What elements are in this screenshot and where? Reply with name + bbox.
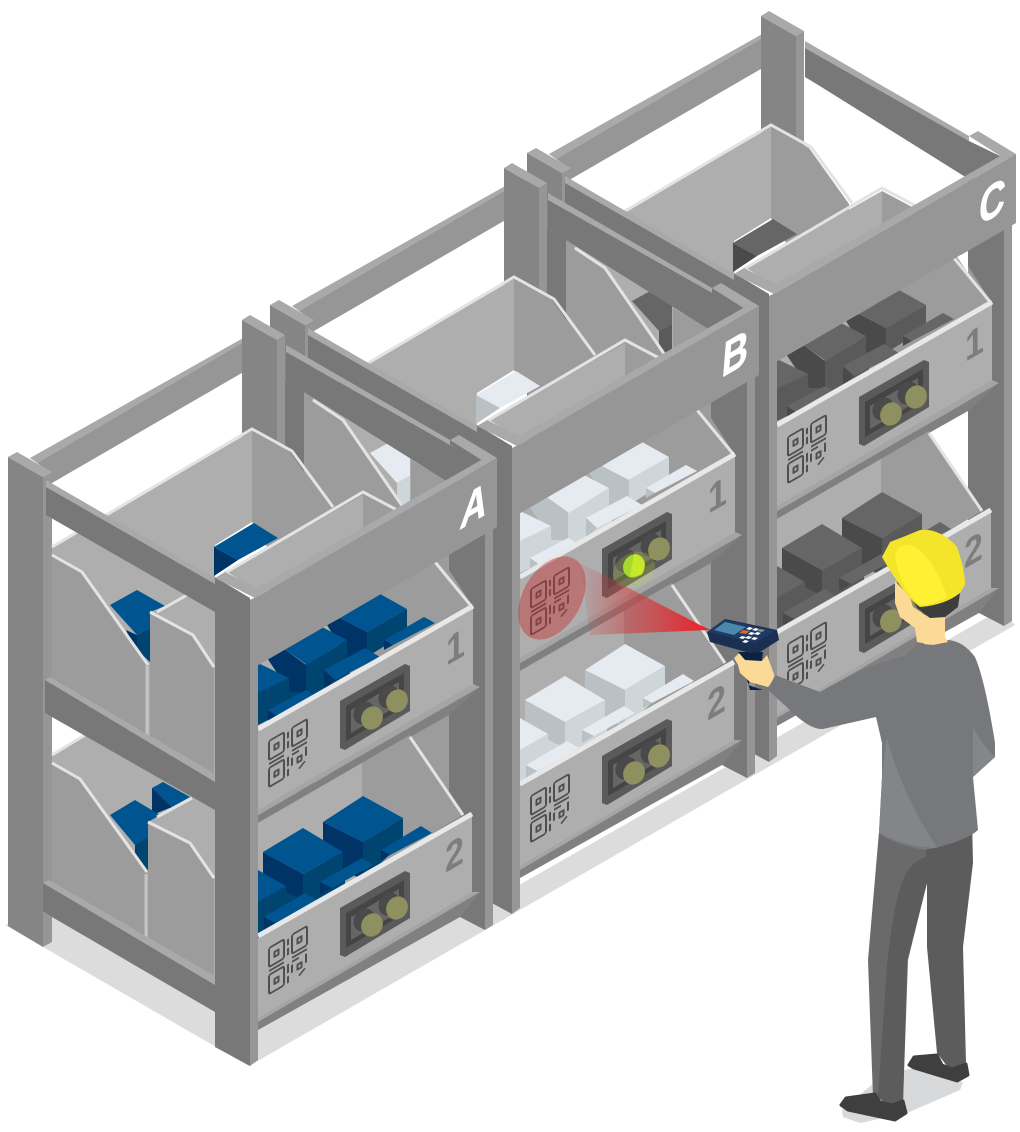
rack B lower bin fittings: [531, 719, 674, 842]
rack B upper bin fittings: [531, 512, 674, 635]
floor shadow: [5, 610, 1015, 1066]
rack C letter: C: [977, 165, 1008, 237]
rack A lower bin fittings: [269, 871, 412, 994]
torso and arm: [768, 640, 995, 850]
rack A bin number 2: 2: [445, 827, 464, 882]
rack C lower bin fittings: [788, 567, 931, 690]
handheld scanner: [707, 619, 779, 653]
hand: [734, 653, 775, 687]
helmet: [882, 530, 965, 607]
rack C bin number 1: 1: [965, 316, 984, 371]
rack B letter: B: [720, 317, 751, 389]
shoes: [841, 1055, 968, 1120]
scanner handle: [738, 652, 763, 690]
neck and face: [895, 581, 948, 645]
icon: lit green indicator: [606, 544, 662, 596]
rack B bin number 2: 2: [707, 675, 726, 730]
rack A bin number 1: 1: [446, 620, 465, 675]
laser scan beam: [504, 545, 710, 651]
rack B: [270, 163, 759, 914]
helmet highlight: [895, 545, 947, 605]
gap beside rack C corner post: [957, 251, 968, 273]
rack C: [527, 11, 1016, 762]
rack A letter: A: [457, 470, 492, 541]
rack A upper bin fittings: [269, 664, 412, 787]
rack C upper bin fittings: [788, 360, 931, 483]
sleeve highlight: [973, 727, 995, 777]
rack C bin number 2: 2: [964, 523, 983, 578]
foot shadow: [842, 1068, 963, 1123]
hair: [910, 593, 960, 618]
legs: [868, 820, 973, 1105]
torso highlight: [879, 737, 937, 848]
worker: [707, 530, 995, 1123]
rack A: [8, 315, 497, 1066]
rack B bin number 1: 1: [708, 468, 727, 523]
